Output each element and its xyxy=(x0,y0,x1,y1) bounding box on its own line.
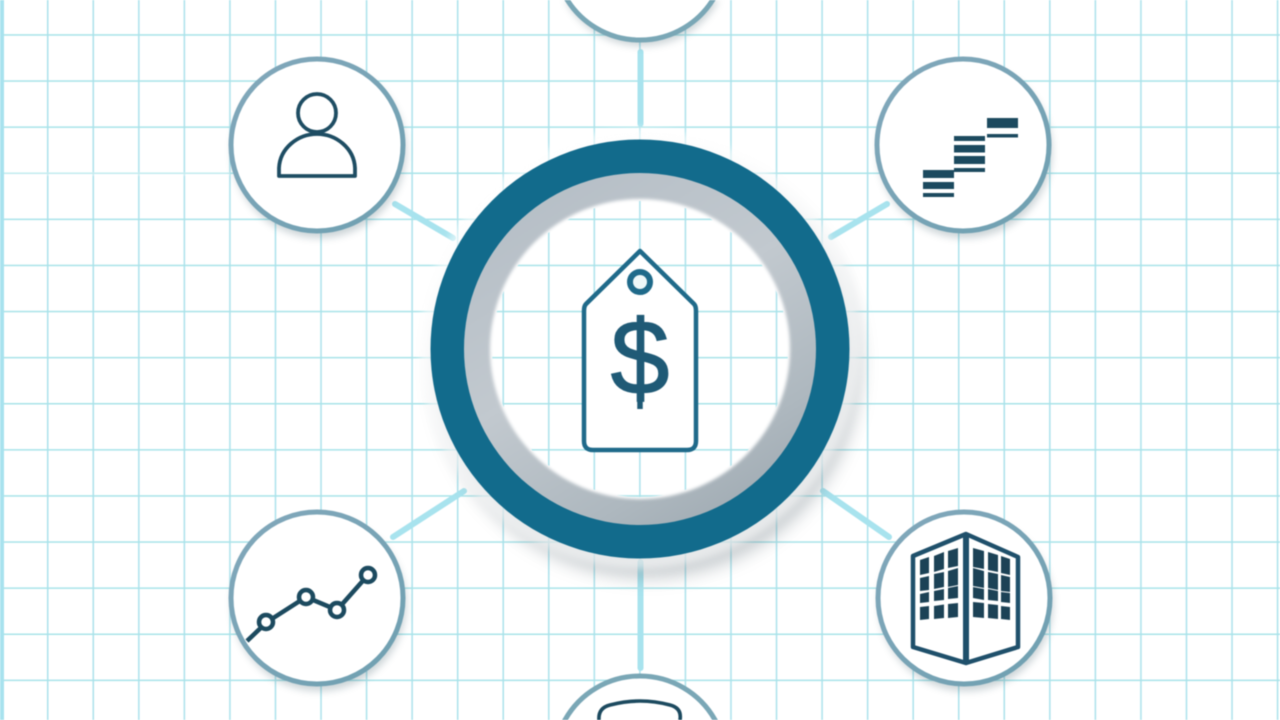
icon: price tag with dollar sign xyxy=(584,251,696,450)
icon: person xyxy=(279,94,355,176)
icon: price tag with dollar sign: $ xyxy=(611,299,669,417)
icon: office building xyxy=(913,534,1018,663)
node: stepped bars xyxy=(877,59,1052,238)
node: line chart xyxy=(231,512,406,691)
node: top (cropped) xyxy=(565,0,719,46)
icon: database xyxy=(599,701,680,720)
connector lines xyxy=(393,52,889,668)
icon: line chart xyxy=(247,568,375,641)
central hub ring xyxy=(420,129,860,577)
node: office building xyxy=(878,512,1053,691)
node: bottom database (cropped) xyxy=(565,676,715,720)
icon: stepped bars xyxy=(923,118,1018,197)
node: person xyxy=(231,59,406,238)
